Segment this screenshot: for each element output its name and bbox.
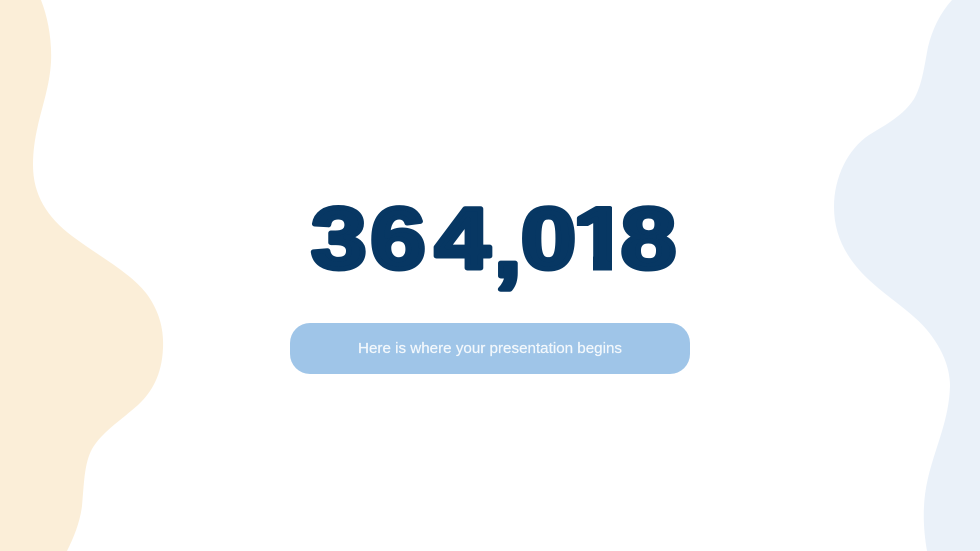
big number (310, 205, 676, 292)
big number: 8 (621, 190, 676, 287)
big number: 364,0 (311, 190, 576, 295)
blob: right pale blue wave (834, 0, 980, 551)
pill background (290, 323, 690, 374)
big number: 1 (573, 190, 628, 287)
subtitle pill (290, 323, 690, 374)
blob: left cream wave (0, 0, 163, 551)
pill text: Here is where your presentation begins (358, 341, 622, 357)
